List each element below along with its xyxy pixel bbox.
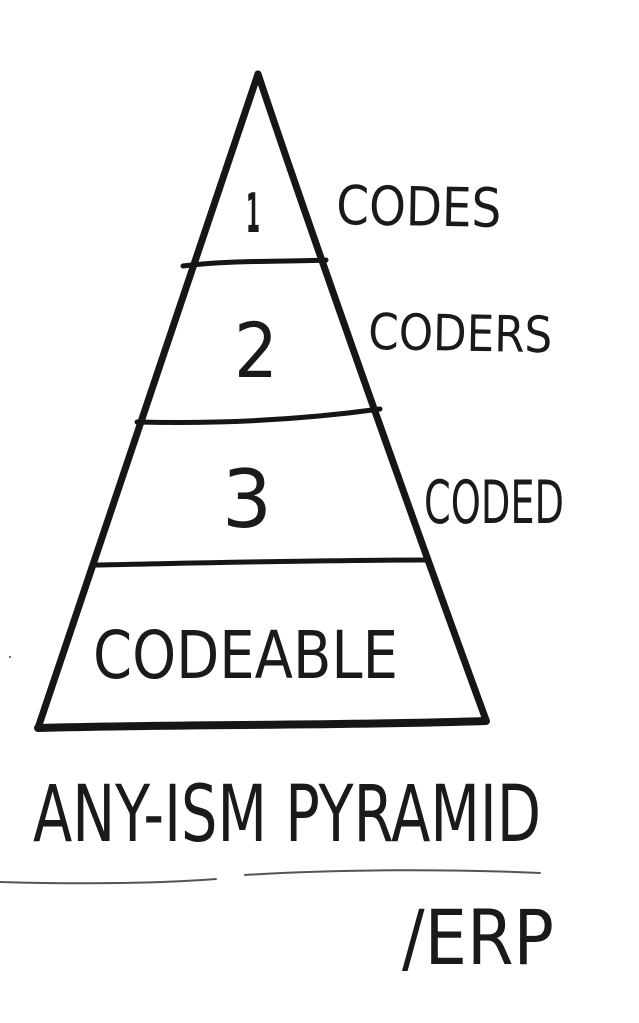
tier 3 number: 3	[222, 453, 272, 546]
label: codes: CODES	[336, 174, 502, 240]
stray dot	[9, 656, 11, 658]
signature: /ERP	[402, 893, 554, 982]
infographic: any-ism pyramid: 1	[246, 182, 260, 245]
pyramid outline	[38, 74, 486, 728]
title underlines	[0, 870, 540, 883]
tier 2 number: 2	[234, 306, 278, 395]
label: coded: CODED	[424, 468, 564, 538]
tier dividers	[95, 260, 428, 565]
tier 4 label: codeable: CODEABLE	[93, 617, 398, 694]
label: coders: CODERS	[368, 303, 553, 364]
